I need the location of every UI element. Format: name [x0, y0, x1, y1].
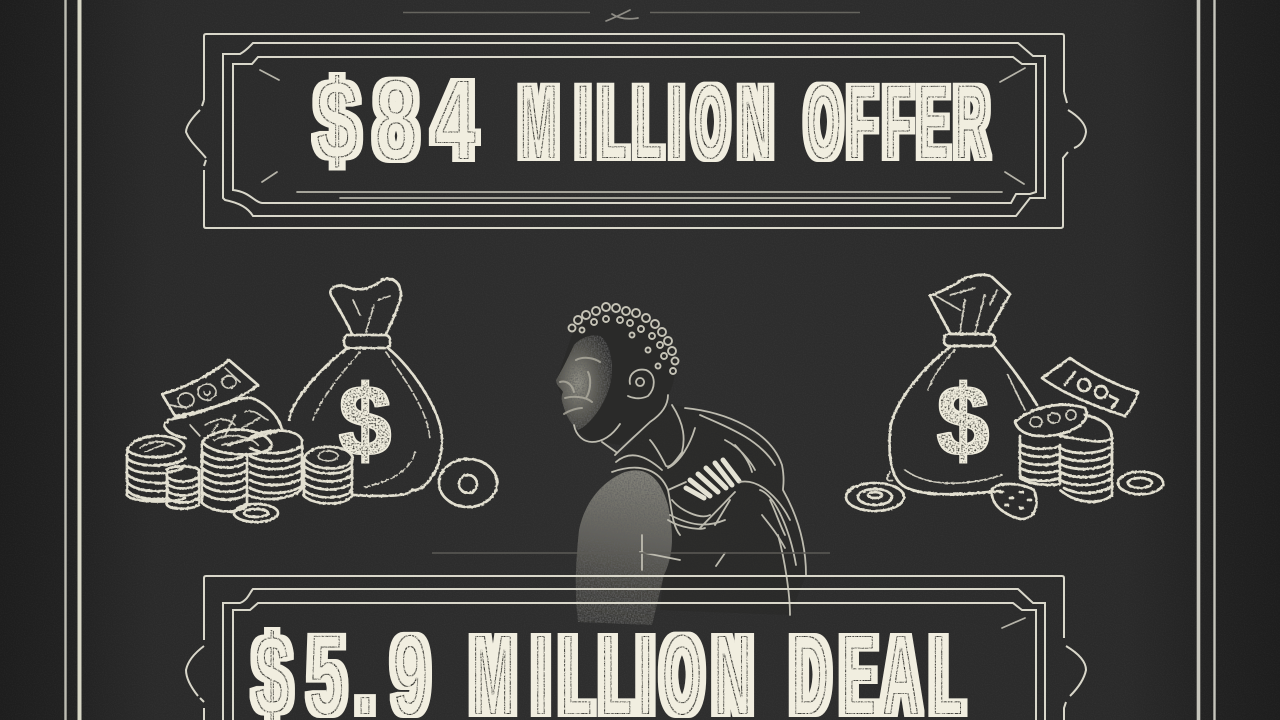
right coin stack: [1015, 405, 1112, 502]
coin stack 2: [167, 466, 199, 509]
man: lower body: [640, 535, 790, 615]
right money bag: [887, 275, 1037, 494]
man: torso: [618, 405, 806, 615]
man: face highlights: [560, 358, 600, 414]
coin stack 1: [127, 436, 185, 502]
left single coin: [439, 459, 497, 507]
bottom banner: $5.9 million deal: [186, 576, 1086, 720]
top ornament: [403, 10, 860, 21]
man illustration: [556, 303, 806, 625]
right left-side coin: [846, 483, 904, 511]
man: head silhouette: [556, 314, 675, 445]
left coin stacks: [127, 430, 353, 512]
coin stack 5: [304, 447, 353, 504]
left money pile: [127, 279, 497, 522]
top banner: $84 million offer: [186, 34, 1086, 228]
man: jersey number stripes: [686, 460, 739, 498]
left money bag: [289, 279, 442, 496]
man: sleeve folds: [668, 482, 790, 529]
top banner label: MILLION OFFER: [520, 64, 988, 181]
bottom-banner decorative top line: [432, 552, 830, 554]
man: jaw and neck: [574, 395, 668, 455]
coin stack 3: [202, 430, 272, 512]
man: hair: [568, 303, 678, 374]
left flat coin: [234, 504, 278, 522]
left banknotes: [162, 360, 282, 445]
top banner amount: $84: [316, 57, 476, 184]
man: face: [556, 335, 612, 430]
right dark pebble: [992, 484, 1036, 519]
man: shoulder and arm shading: [576, 470, 672, 625]
bottom banner frame: [186, 576, 1086, 720]
right banknote: [1042, 358, 1138, 416]
right bag dollar sign: $: [937, 365, 989, 477]
right money pile: [846, 275, 1163, 519]
man: ear: [628, 370, 654, 398]
left bag dollar sign: $: [339, 365, 391, 477]
top banner frame: [186, 34, 1086, 228]
man: jersey collar and straps: [612, 405, 695, 535]
right small coin: [1118, 472, 1163, 494]
coin stack 4: [248, 431, 302, 499]
man: back muscle lines: [685, 408, 806, 575]
